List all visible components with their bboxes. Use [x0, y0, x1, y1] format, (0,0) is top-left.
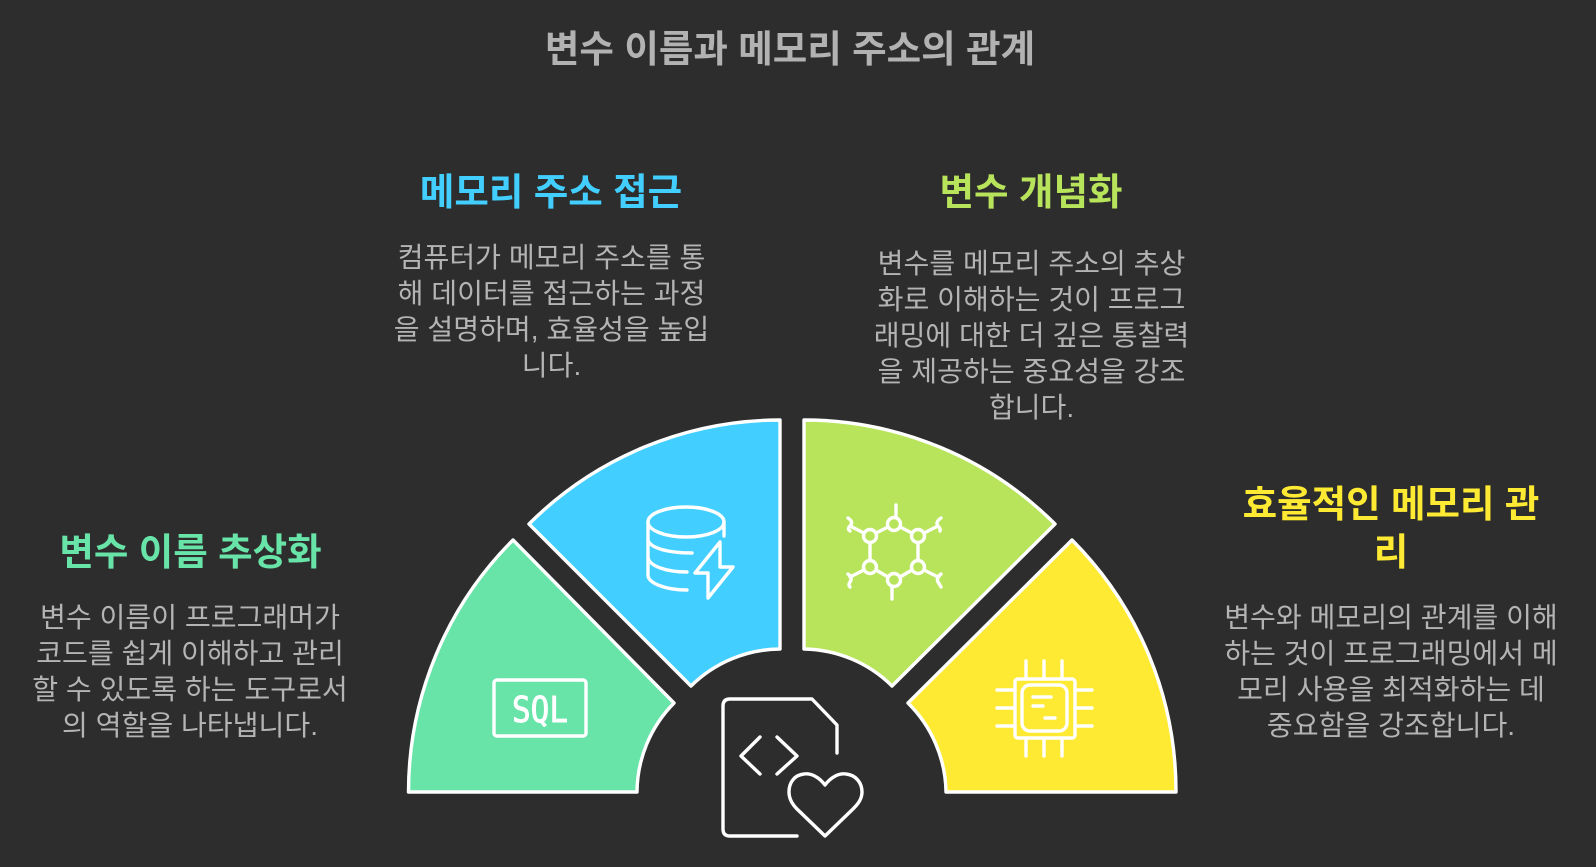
text: memory address access: 컴퓨터가 메모리 주소를 통: [398, 242, 705, 273]
icon: SQL: [494, 680, 586, 736]
text: variable conceptualization: 을 제공하는 중요성을 강조: [878, 356, 1185, 387]
segment: blue: [529, 420, 780, 686]
text: efficient memory management: 변수와 메모리의 관계를 이해: [1224, 602, 1558, 633]
text: efficient memory management: 모리 사용을 최적화하는 데: [1237, 674, 1545, 705]
icon: SQL: SQL: [512, 690, 568, 731]
heading: efficient memory management: 리: [1374, 531, 1408, 573]
heading: efficient memory management: [1243, 483, 1539, 573]
text: memory address access: 을 설명하며, 효율성을 높입: [394, 314, 709, 345]
text: variable name abstraction: 의 역할을 나타냅니다.: [62, 710, 318, 741]
title: 변수 이름과 메모리 주소의 관계: [545, 28, 1035, 70]
text: efficient memory management: 하는 것이 프로그래밍에서 메: [1224, 638, 1558, 669]
icon: database with lightning bolt: [648, 507, 733, 598]
text: variable conceptualization: 합니다.: [989, 392, 1074, 423]
text: efficient memory management: 중요함을 강조합니다.: [1267, 710, 1515, 741]
text: efficient memory management: [1224, 602, 1558, 741]
text: memory address access: 해 데이터를 접근하는 과정: [398, 278, 705, 309]
text: variable name abstraction: 변수 이름이 프로그래머가: [40, 602, 340, 633]
segment: lime: [804, 420, 1055, 686]
icon: molecule: [848, 505, 941, 599]
segment: green: [408, 540, 674, 792]
text: variable conceptualization: 화로 이해하는 것이 프로그: [878, 284, 1185, 315]
heading: efficient memory management: 효율적인 메모리 관: [1243, 483, 1539, 525]
heading: memory address access: 메모리 주소 접근: [420, 171, 682, 213]
text: variable conceptualization: [874, 248, 1189, 423]
text: memory address access: [394, 242, 709, 381]
text: variable name abstraction: 코드를 쉽게 이해하고 관리: [36, 638, 344, 669]
icon: center code file with heart: [723, 699, 862, 836]
text: memory address access: 니다.: [522, 350, 581, 381]
segment: yellow: [908, 540, 1176, 792]
heading: variable name abstraction: 변수 이름 추상화: [59, 531, 322, 573]
text: variable name abstraction: [32, 602, 348, 741]
text: variable name abstraction: 할 수 있도록 하는 도구로서: [32, 674, 348, 705]
text: variable conceptualization: 래밍에 대한 더 깊은 통찰력: [874, 320, 1189, 351]
text: variable conceptualization: 변수를 메모리 주소의 추상: [878, 248, 1185, 279]
heading: variable conceptualization: 변수 개념화: [940, 171, 1122, 213]
icon: microchip: [997, 661, 1092, 756]
